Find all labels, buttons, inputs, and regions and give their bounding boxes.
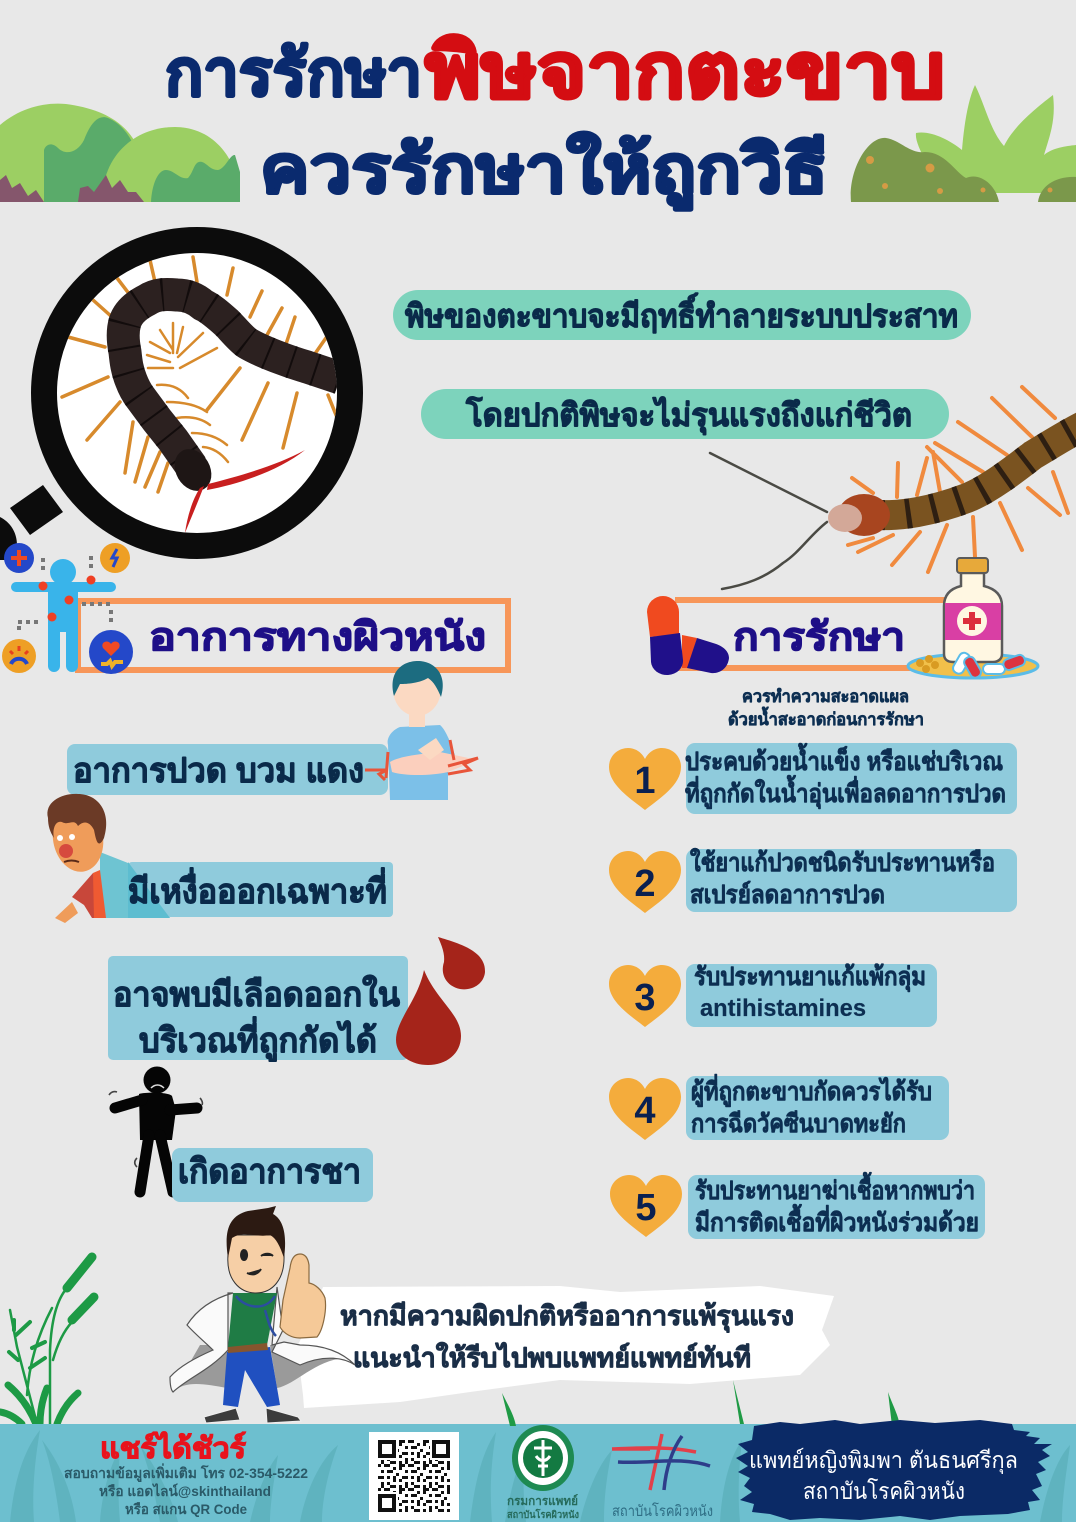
centipede in lens [62, 257, 340, 533]
header text: อาการทางผิวหนัง [149, 616, 486, 659]
icon: medicine bottle and plate [908, 558, 1038, 680]
treatment intro text: ควรทำความสะอาดแผล [742, 687, 909, 706]
title [165, 29, 945, 211]
icon: sweating man [47, 794, 170, 923]
logo: department of medical services: สถาบันโรคผิวหนัง [507, 1508, 579, 1521]
step 1 text box: ประคบด้วยน้ำแข็ง หรือแช่บริเวณ [685, 742, 1003, 776]
heart number 1 [609, 748, 681, 810]
step 4 text box [686, 1074, 949, 1140]
icon: boy with arm pain [365, 661, 478, 800]
step 3 text box: antihistamines [700, 995, 866, 1022]
symptom: sweating: มีเหงื่อออกเฉพาะที่ [128, 867, 387, 911]
decoration: right bushes and leaves [851, 85, 1076, 202]
body [880, 425, 1076, 515]
treatment header [647, 558, 1038, 680]
legs [848, 387, 1068, 572]
treatment step 2 [609, 847, 1017, 913]
step 3 text box: รับประทานยาแก้แพ้กลุ่ม [694, 963, 926, 993]
heart number 1: 1 [634, 760, 656, 802]
icon: body pain figure [2, 543, 133, 674]
step 1 text box [685, 742, 1017, 814]
QR code [369, 1432, 459, 1520]
green shirt [228, 1293, 277, 1348]
step 5 text box [688, 1171, 985, 1239]
belt [228, 1343, 268, 1353]
logo: department of medical services [507, 1425, 579, 1521]
step 3 text box [686, 963, 937, 1027]
step 4 text box: การฉีดวัคซีนบาดทะยัก [691, 1110, 906, 1138]
title line 2 navy: ควรรักษาให้ถูกวิธี [260, 130, 828, 211]
icon: capsules [647, 596, 729, 675]
contact lines: สอบถามข้อมูลเพิ่มเติม โทร 02-354-5222 [64, 1463, 308, 1482]
heart number 5 [610, 1175, 682, 1237]
heart number 2: 2 [634, 863, 656, 905]
author brush banner [736, 1420, 1052, 1520]
treatment intro text [728, 687, 924, 729]
treatment step 1 [609, 742, 1017, 814]
doctor character [170, 1206, 355, 1423]
shoes [204, 1408, 301, 1423]
heart number 4: 4 [634, 1090, 656, 1132]
small green grass blades [502, 1380, 900, 1426]
share heading: แชร์ได้ชัวร์ [100, 1431, 246, 1465]
symptom: numbness: เกิดอาการชา [178, 1153, 361, 1191]
footer band [0, 1424, 1076, 1522]
step 1 text box: ที่ถูกกัดในน้ำอุ่นเพื่อลดอาการปวด [685, 774, 1006, 810]
step 5 text box: มีการติดเชื้อที่ผิวหนังร่วมด้วย [695, 1203, 979, 1237]
header frame [675, 600, 950, 668]
white coat [170, 1293, 233, 1392]
callout: see a doctor [297, 1286, 834, 1408]
contact lines [64, 1463, 308, 1517]
author brush banner: แพทย์หญิงพิมพา ตันธนศรีกุล [749, 1447, 1018, 1474]
heart number 5: 5 [635, 1187, 657, 1229]
symptom: sweating [128, 862, 393, 918]
symptom: bleeding: อาจพบมีเลือดออกใน [113, 974, 400, 1014]
step 2 text box [686, 847, 1017, 912]
treatment step 3 [609, 963, 937, 1027]
heart number 3: 3 [634, 977, 656, 1019]
treatment step 4 [609, 1074, 949, 1140]
logo: institute of dermatology: สถาบันโรคผิวหนัง [612, 1502, 713, 1520]
icon: numb person silhouette [109, 1066, 202, 1192]
symptoms header [2, 543, 508, 674]
step 2 text box: ใช้ยาแก้ปวดชนิดรับประทานหรือ [690, 847, 995, 877]
gray coat lining [173, 1345, 345, 1392]
magnifier handle [0, 485, 63, 560]
pill: not life threatening: โดยปกติพิษจะไม่รุนแรงถึงแก่ชีวิต [465, 396, 912, 436]
callout: see a doctor: หากมีความผิดปกติหรืออาการแพ้รุนแรง [340, 1301, 794, 1333]
logo: institute of dermatology [612, 1434, 713, 1520]
logo: department of medical services: กรมการแพทย์ [507, 1494, 578, 1508]
symptom: bleeding [108, 956, 408, 1062]
callout: see a doctor: แนะนำให้รีบไปพบแพทย์แพทย์ทันที [353, 1342, 751, 1373]
footer contact text [64, 1431, 308, 1517]
heart number 4 [609, 1078, 681, 1140]
footer grass [10, 1430, 1070, 1522]
trousers [223, 1347, 280, 1407]
head and hair [228, 1235, 284, 1293]
step 2 text box: สเปรย์ลดอาการปวด [690, 880, 885, 909]
decoration: left bushes [0, 104, 240, 202]
header text: การรักษา [733, 616, 905, 659]
header frame [78, 601, 508, 670]
icon: blood drops [396, 937, 485, 1065]
symptom: pain swelling redness: อาการปวด บวม แดง [73, 752, 364, 790]
lens rim [44, 240, 350, 546]
magnifier with centipede [0, 240, 350, 560]
step 5 text box: รับประทานยาฆ่าเชื้อหากพบว่า [695, 1171, 975, 1205]
face [241, 1250, 273, 1274]
symptom: bleeding: บริเวณที่ถูกกัดได้ [139, 1016, 377, 1062]
head [838, 494, 890, 536]
title line 1 navy: การรักษา [165, 37, 422, 109]
treatment step 5 [610, 1171, 985, 1239]
grass left [0, 1257, 94, 1424]
contact lines: หรือ สแกน QR Code [125, 1501, 247, 1517]
pill: not life threatening [421, 389, 949, 439]
contact lines: หรือ แอดไลน์@skinthailand [99, 1482, 271, 1499]
pill: nerve toxin [393, 290, 971, 340]
thumbs up hand [280, 1254, 326, 1338]
step 4 text box: ผู้ที่ถูกตะขาบกัดควรได้รับ [691, 1074, 932, 1108]
heart number 2 [609, 851, 681, 913]
symptom: numbness [172, 1148, 373, 1202]
treatment intro text: ด้วยน้ำสะอาดก่อนการรักษา [728, 706, 924, 729]
heart number 3 [609, 965, 681, 1027]
antennae [710, 453, 827, 589]
centipede illustration [710, 387, 1076, 589]
stethoscope [236, 1296, 276, 1336]
author brush banner: สถาบันโรคผิวหนัง [803, 1478, 965, 1504]
title line 1 red: พิษจากตะขาบ [425, 29, 945, 114]
pill: nerve toxin: พิษของตะขาบจะมีฤทธิ์ทำลายระบบประสาท [405, 292, 958, 334]
